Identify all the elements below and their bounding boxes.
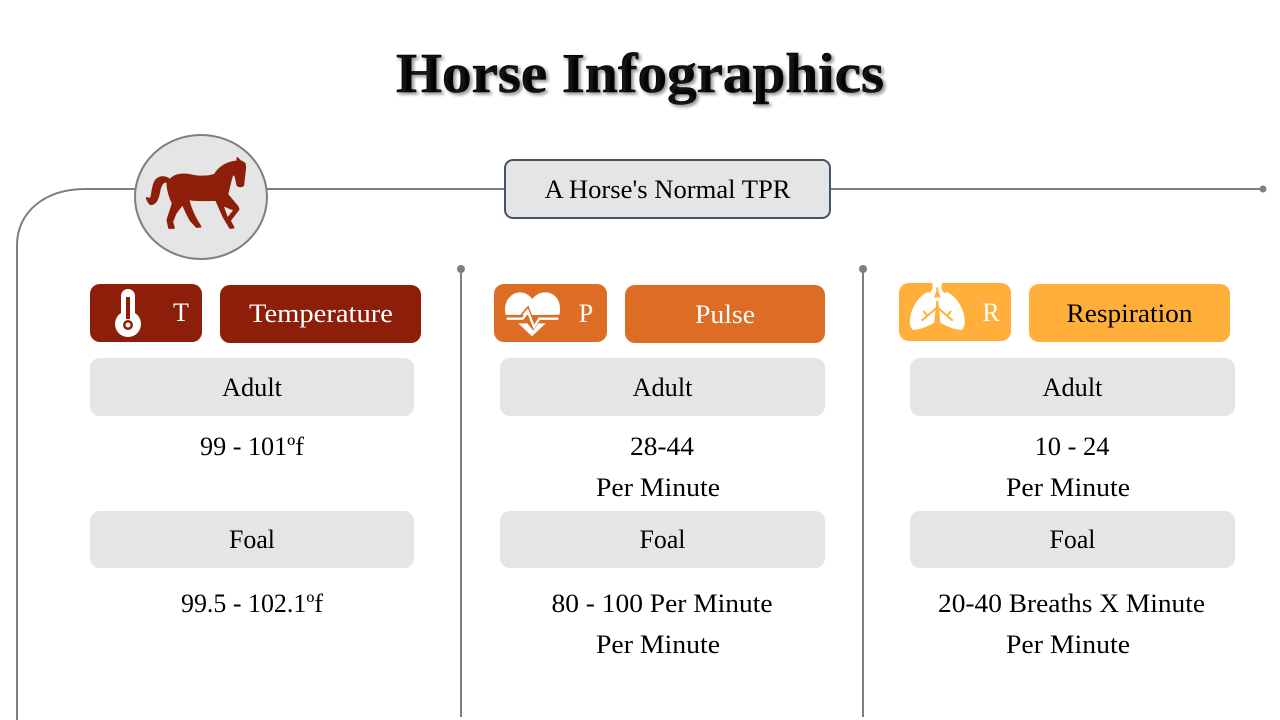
adult value: Per Minute (1006, 473, 1130, 502)
respiration label (1029, 284, 1230, 342)
adult value: 99 - 101ºf (200, 432, 304, 461)
foal label (500, 511, 825, 568)
panel: pulse (494, 284, 825, 659)
connector line (17, 186, 1266, 720)
foal value: 20-40 Breaths X Minute (938, 589, 1205, 618)
respiration letter tile: R (982, 298, 1000, 327)
foal value: 99.5 - 102.1ºf (181, 589, 323, 618)
adult label: Adult (632, 373, 693, 402)
adult value (1006, 432, 1130, 502)
foal label: Foal (1050, 525, 1096, 554)
pulse letter tile (494, 284, 607, 342)
pulse letter tile: P (579, 299, 593, 328)
respiration label: Respiration (1066, 299, 1192, 328)
heading box: A Horse's Normal TPR (544, 175, 791, 204)
adult value: Per Minute (596, 473, 720, 502)
adult label (90, 358, 414, 416)
respiration letter tile (899, 283, 1011, 341)
temperature letter tile (90, 284, 202, 342)
divider: left (457, 265, 465, 717)
heading box (505, 160, 830, 218)
icon: lungs (910, 283, 965, 330)
temperature label: Temperature (249, 299, 393, 328)
icon: heart with pulse (503, 292, 563, 336)
adult value: 28-44 (630, 432, 694, 461)
title: Horse Infographics (396, 43, 884, 105)
foal value: Per Minute (1006, 630, 1130, 659)
foal value (938, 589, 1205, 659)
pulse label (625, 285, 825, 343)
panel: temperature (90, 284, 421, 618)
adult value: 10 - 24 (1034, 432, 1110, 461)
temperature label (220, 285, 421, 343)
adult label: Adult (222, 373, 283, 402)
foal value (552, 589, 772, 659)
temperature letter tile: T (173, 298, 189, 327)
icon: horse in circle (135, 135, 267, 259)
pulse label: Pulse (695, 300, 755, 329)
icon: thermometer (115, 289, 141, 337)
adult label: Adult (1042, 373, 1103, 402)
foal label (90, 511, 414, 568)
foal label (910, 511, 1235, 568)
foal label: Foal (640, 525, 686, 554)
adult value (596, 432, 720, 502)
adult label (910, 358, 1235, 416)
divider: right (859, 265, 867, 717)
panel: respiration (899, 283, 1235, 659)
foal label: Foal (229, 525, 275, 554)
foal value: Per Minute (596, 630, 720, 659)
adult label (500, 358, 825, 416)
foal value: 80 - 100 Per Minute (552, 589, 772, 618)
